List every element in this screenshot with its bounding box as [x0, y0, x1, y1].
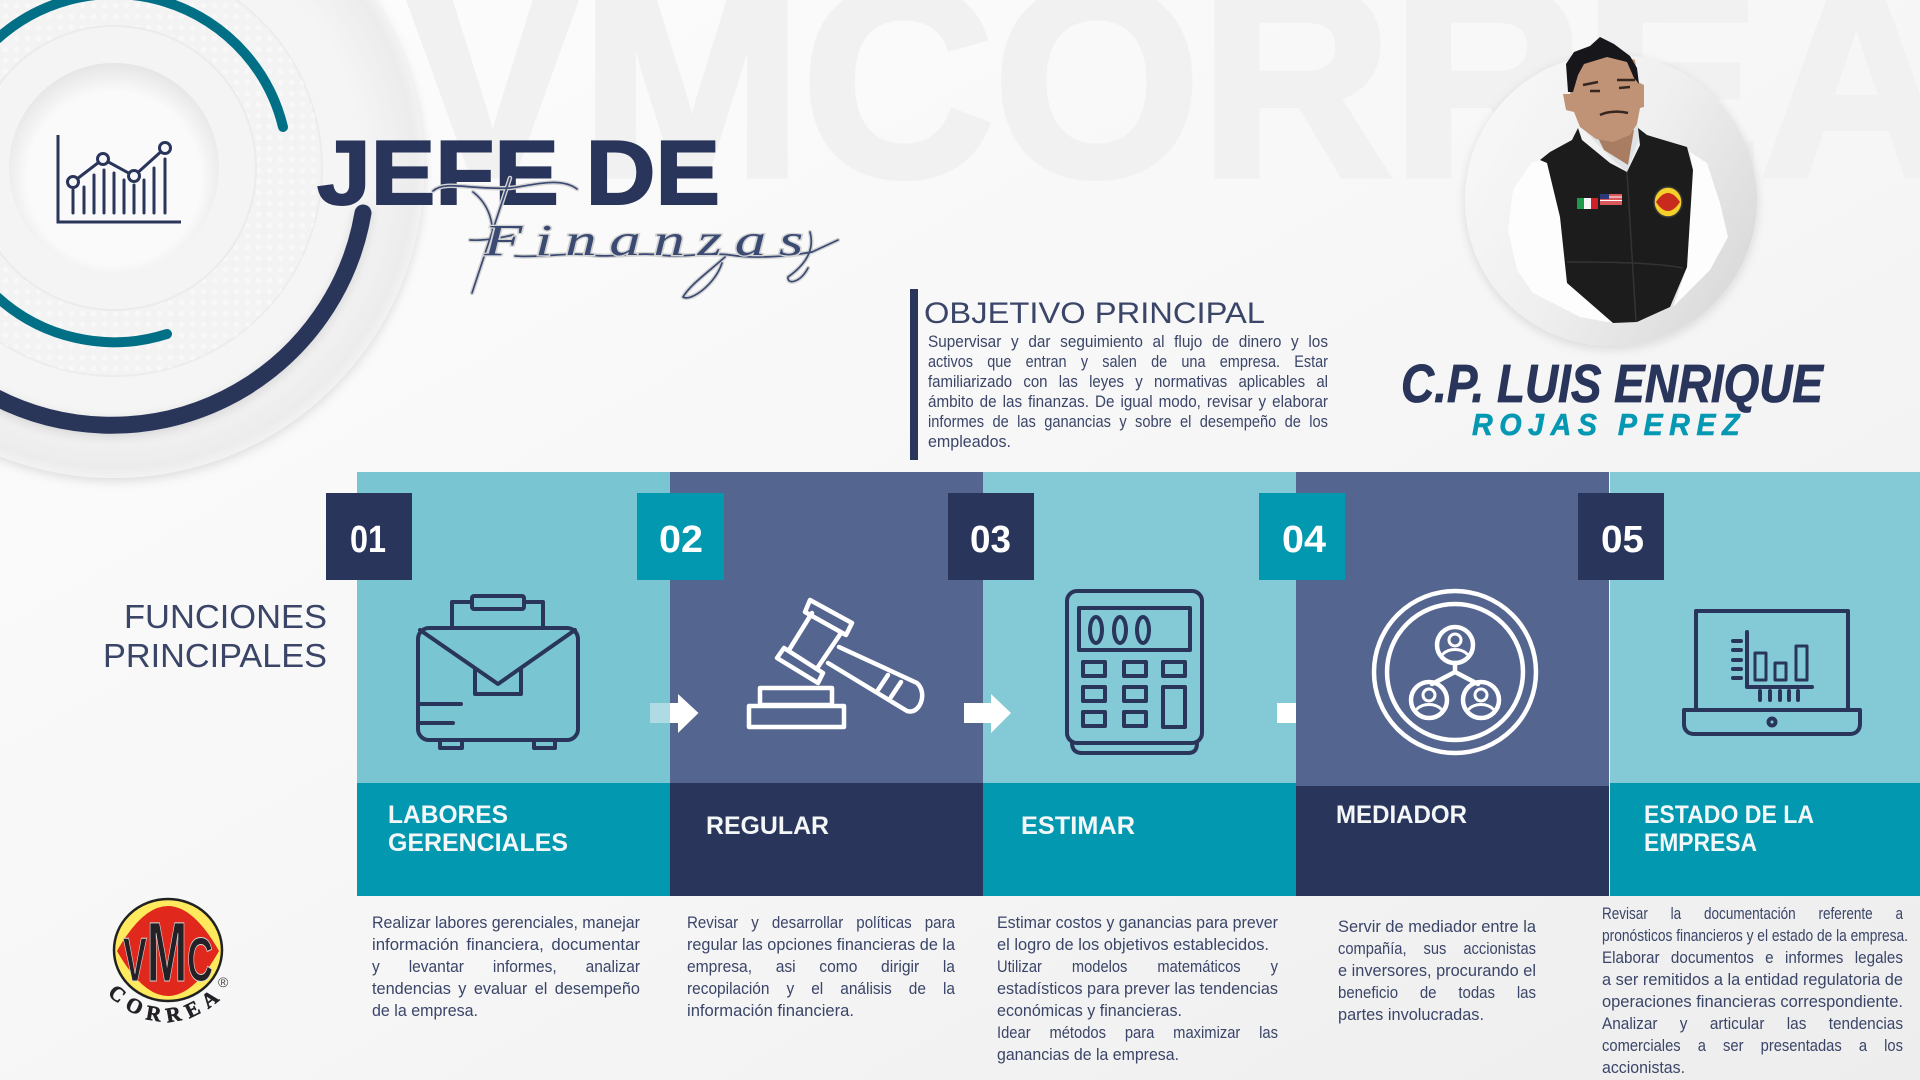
text block: function 4 [1338, 917, 1537, 1024]
hair [1566, 37, 1639, 92]
title: JEFE DE: JEFE DE [317, 123, 720, 224]
panel: function 3 [983, 472, 1296, 896]
text block: function 4: Servir de mediador entre la [1338, 917, 1537, 936]
icon: line and bar chart [58, 135, 181, 222]
text block: function 2: recopilación y el análisis de la [687, 979, 955, 998]
text block: function 3 [997, 913, 1278, 1064]
label: mediador: MEDIADOR [1336, 801, 1467, 829]
heading: funciones principales [103, 598, 327, 674]
face [1563, 50, 1644, 142]
label: estado de la empresa [1644, 801, 1814, 857]
portrait: circle with person [1465, 37, 1757, 346]
vest [1540, 128, 1693, 323]
text block: function 5: accionistas. [1602, 1058, 1685, 1077]
label: estimar: ESTIMAR [1021, 812, 1135, 840]
panel: objetivo principal [910, 289, 1328, 460]
heading: funciones principales: PRINCIPALES [103, 637, 327, 674]
icon: calculator [1067, 591, 1202, 753]
text block: objetivo: activos que entran y salen de una empresa. Estar [928, 352, 1328, 371]
text block: function 2: Revisar y desarrollar políticas para [687, 913, 955, 932]
text block: objetivo: Supervisar y dar seguimiento al flujo de dinero y los [928, 332, 1328, 351]
badge: 01 [326, 493, 412, 580]
text block: objetivo: informes de las ganancias y sobre el desempeño de los [928, 412, 1328, 431]
text block: function 1: Realizar labores gerenciales, manejar [372, 913, 640, 932]
label: estado de la empresa: ESTADO DE LA [1644, 801, 1814, 829]
label: estado de la empresa: EMPRESA [1644, 829, 1757, 857]
logo: VMC Correa: CORREA [110, 986, 220, 1023]
neck and shirt [1582, 118, 1640, 172]
text block: function 2: regular las opciones financieras de la [687, 935, 956, 954]
title: Finanzas script: Finanzas [483, 216, 816, 265]
text block: function 3: Estimar costos y ganancias para prever [997, 913, 1278, 932]
flag: Mexico [1577, 198, 1598, 209]
badge: 05 [1578, 493, 1664, 580]
badge: 02 [637, 493, 724, 580]
badge: 01: 01 [350, 519, 386, 561]
text block: function 5: a ser remitidos a la entidad regulatoria de [1602, 970, 1903, 989]
flag: USA [1600, 194, 1622, 205]
text block: function 1: información financiera, documentar [372, 935, 640, 954]
text block: function 3: Utilizar modelos matemáticos y [997, 957, 1278, 976]
arc: teal upper [0, 0, 283, 127]
icon: laptop with chart [1684, 611, 1860, 734]
logo: VMC Correa: VMC [123, 905, 213, 999]
text block: function 4: partes involucradas. [1338, 1005, 1484, 1024]
badge: 04 [1259, 493, 1345, 580]
right sleeve [1673, 152, 1728, 307]
name: Rojas Perez: ROJAS PEREZ [1472, 407, 1746, 442]
panel: function 4 [1296, 472, 1609, 896]
logo: VMC Correa [110, 898, 229, 1023]
badge: 05: 05 [1601, 519, 1644, 561]
label: labores gerenciales [388, 801, 568, 857]
icon: gavel [749, 600, 922, 727]
text block: function 5 [1602, 904, 1908, 1077]
arrow: 3 to 4 [1277, 703, 1296, 723]
text block: function 3: Idear métodos para maximizar las [997, 1023, 1278, 1042]
badge: 04: 04 [1282, 519, 1326, 561]
heading: objetivo principal: OBJETIVO PRINCIPAL [924, 297, 1265, 330]
text block: function 1: tendencias y evaluar el desempeño [372, 979, 640, 998]
arrow: 1 to 2 [650, 694, 698, 733]
panel: concentric circle emblem [0, 0, 424, 478]
arc: teal lower [0, 295, 167, 342]
label: labores gerenciales: LABORES [388, 801, 508, 829]
icon: people network [1374, 591, 1536, 753]
arc: navy [0, 213, 363, 425]
text block: function 2 [687, 913, 956, 1020]
left sleeve [1508, 160, 1613, 323]
text block: function 3: el logro de los objetivos establecidos. [997, 935, 1269, 954]
panel: function 5 [1610, 472, 1920, 896]
name: C.P. Luis Enrique: C.P. LUIS ENRIQUE [1401, 354, 1825, 414]
badge: VMC jacket patch [1654, 187, 1682, 217]
arrow: 2 to 3 [964, 694, 1011, 733]
text block: function 1: y levantar informes, analizar [372, 957, 640, 976]
text block: function 2: información financiera. [687, 1001, 854, 1020]
panel: function 1 [357, 472, 670, 896]
eyes, brows and mouth [1583, 80, 1635, 115]
text block: function 3: ganancias de la empresa. [997, 1045, 1179, 1064]
text block: function 5: operaciones financieras correspondiente. [1602, 992, 1903, 1011]
label: regular: REGULAR [706, 812, 829, 840]
text block: function 3: estadísticos para prever las tendencias [997, 979, 1278, 998]
text block: function 1: de la empresa. [372, 1001, 478, 1020]
panel: function 2 [670, 472, 983, 896]
label: labores gerenciales: GERENCIALES [388, 829, 568, 857]
text block: objetivo: familiarizado con las leyes y normativas aplicables al [928, 372, 1328, 391]
badge: 03 [948, 493, 1034, 580]
title: Finanzas script [433, 178, 838, 298]
badge: 03: 03 [970, 519, 1011, 561]
icon: briefcase [418, 596, 578, 748]
text block: function 2: empresa, asi como dirigir la [687, 957, 955, 976]
text block: objetivo: empleados. [928, 432, 1011, 451]
text block: function 4: e inversores, procurando el [1338, 961, 1536, 980]
text block: function 4: compañía, sus accionistas [1338, 939, 1536, 958]
badge: 02: 02 [659, 519, 703, 561]
text block: function 4: beneficio de todas las [1338, 983, 1536, 1002]
text block: function 1 [372, 913, 640, 1020]
logo: VMC Correa: ® [218, 974, 229, 990]
text block: objetivo: ámbito de las finanzas. De igual modo, revisar y elaborar [928, 392, 1328, 411]
text block: function 3: económicas y financieras. [997, 1001, 1182, 1020]
text block: objetivo [928, 332, 1328, 451]
heading: funciones principales: FUNCIONES [124, 598, 327, 635]
